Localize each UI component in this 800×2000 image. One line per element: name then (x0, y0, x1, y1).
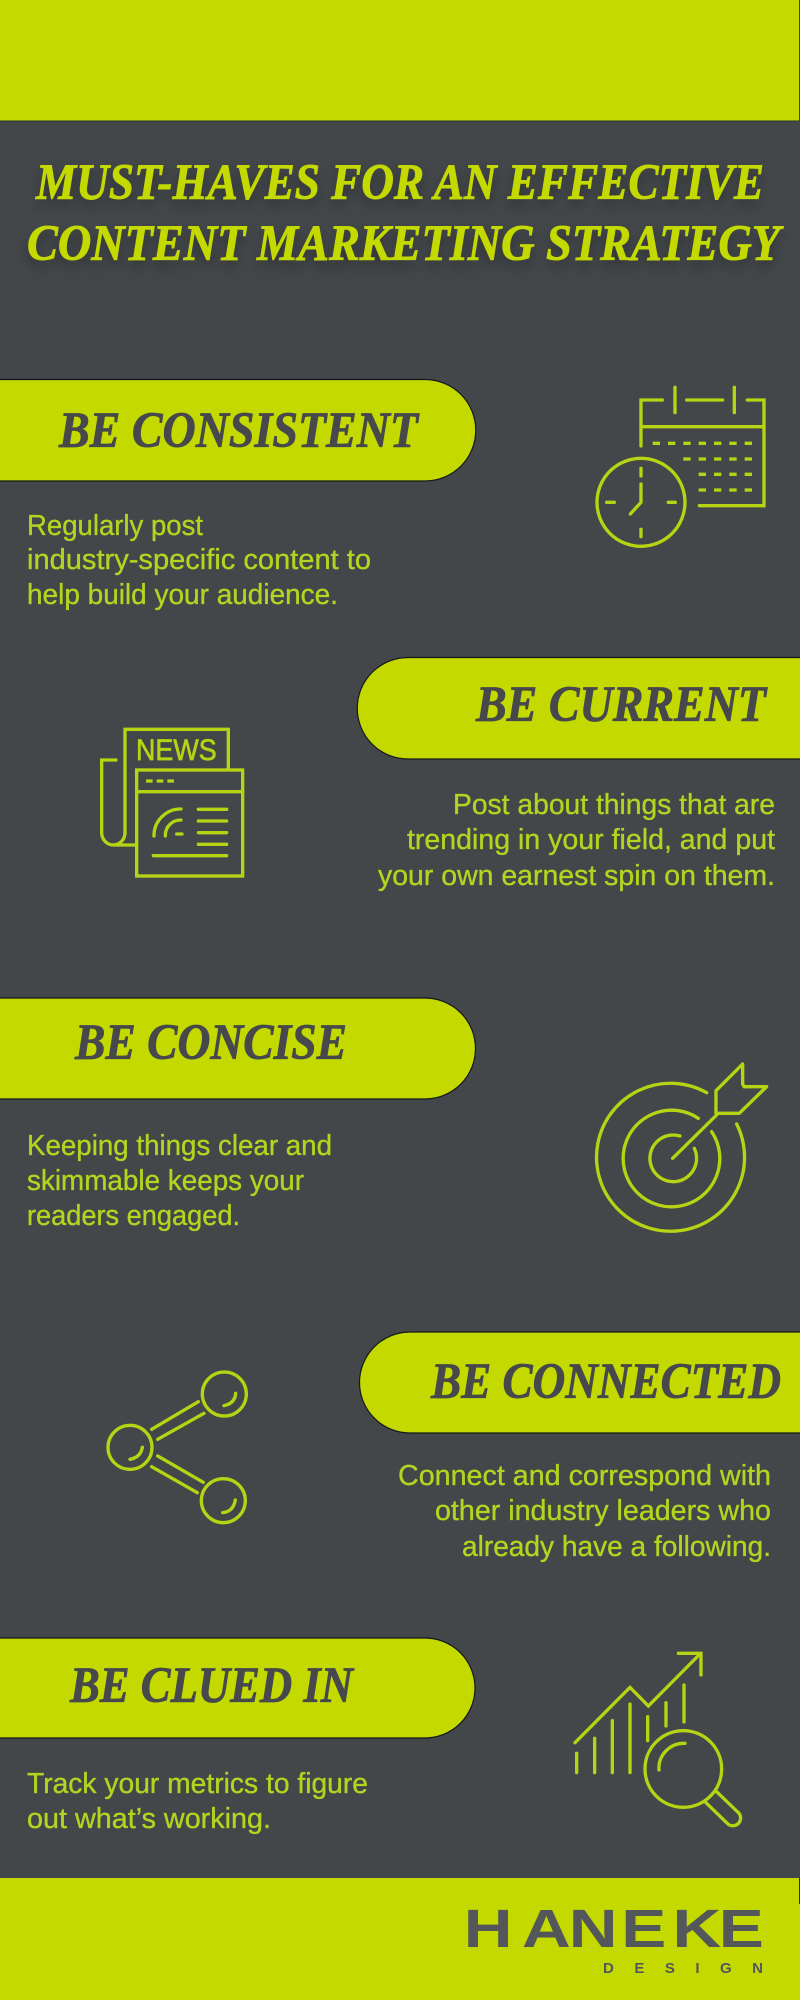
text: be connected: other industry leaders who (435, 1495, 771, 1527)
panel: be current (102, 658, 800, 892)
text: be connected: Connect and correspond with (398, 1460, 771, 1492)
pill: be consistent (0, 380, 476, 481)
text: be current: your own earnest spin on them. (378, 860, 775, 892)
icon: target with arrow (597, 1064, 767, 1231)
logo: haneke design: DESIGN (603, 1960, 763, 1977)
logo: haneke design: HANEKE (464, 1898, 764, 1958)
icon: calendar and clock (597, 387, 764, 546)
text: be current (378, 789, 775, 892)
heading: be clued in: BE CLUED IN (69, 1658, 355, 1714)
text: be consistent: help build your audience. (27, 579, 338, 611)
pill: be concise (0, 998, 475, 1099)
text: be concise: Keeping things clear and (27, 1130, 332, 1162)
text: be consistent (27, 510, 371, 611)
icon: newspaper (102, 729, 243, 876)
text: be connected: already have a following. (462, 1531, 771, 1563)
panel: be clued in (0, 1638, 741, 1835)
text: be clued in (27, 1768, 368, 1835)
icon: growth chart with magnifier (575, 1653, 741, 1826)
text: be consistent: industry-specific content to (27, 544, 371, 576)
text: be concise (27, 1130, 332, 1232)
heading: be current: BE CURRENT (475, 677, 768, 733)
text: be clued in: out what’s working. (27, 1803, 271, 1835)
text: be current: Post about things that are (453, 789, 775, 821)
text: be concise: skimmable keeps your (27, 1165, 304, 1197)
panel: be consistent (0, 380, 764, 611)
top band (0, 0, 800, 122)
panel: be connected (108, 1332, 800, 1563)
icon: share nodes (108, 1372, 246, 1523)
pill: be clued in (0, 1638, 475, 1738)
text: be clued in: Track your metrics to figure (27, 1768, 368, 1800)
panel: be concise (0, 998, 767, 1232)
heading: be consistent: BE CONSISTENT (58, 403, 420, 459)
text: be consistent: Regularly post (27, 510, 203, 542)
title (27, 155, 784, 272)
heading: be concise: BE CONCISE (74, 1015, 347, 1071)
text: be concise: readers engaged. (27, 1200, 240, 1232)
icon: newspaper: NEWS (136, 734, 217, 767)
text: be connected (398, 1460, 771, 1563)
bottom band (0, 1878, 800, 2000)
text: be current: trending in your field, and put (407, 824, 775, 856)
pill: be current (357, 658, 800, 759)
pill: be connected (360, 1332, 800, 1433)
